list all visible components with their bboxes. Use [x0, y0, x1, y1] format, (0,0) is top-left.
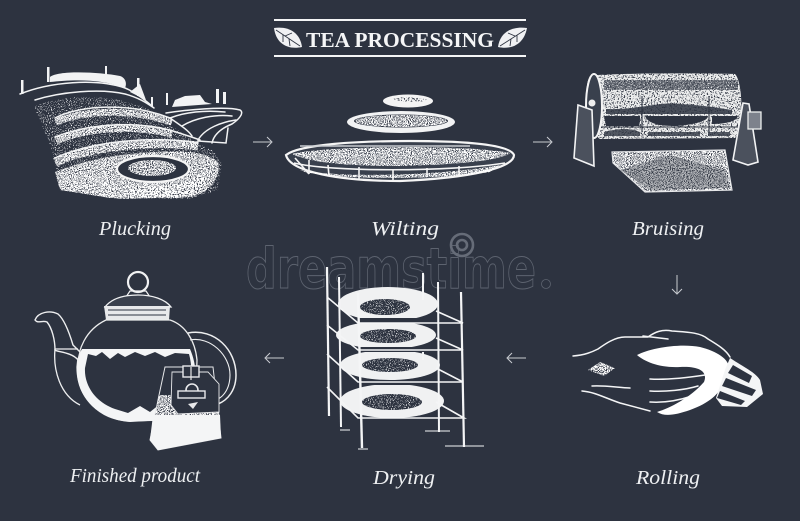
tea liquid: [77, 349, 196, 422]
step: wilting illustration: [286, 94, 514, 181]
title: TEA PROCESSING: [306, 28, 494, 52]
gear: [748, 112, 761, 129]
icon: left leaf: [274, 28, 302, 48]
hill stipple: [34, 97, 222, 199]
trays: [336, 287, 444, 418]
arrow: rolling to drying: [507, 353, 526, 363]
large tray: [286, 141, 514, 181]
label: Plucking: Plucking: [98, 218, 171, 240]
step: plucking illustration: [20, 66, 242, 199]
stands: [574, 105, 594, 166]
shelves: [327, 297, 464, 418]
plateau on top of hill: [116, 156, 190, 182]
spout: [35, 312, 80, 360]
step: rolling illustration: [573, 330, 763, 415]
tray: [612, 150, 732, 192]
teapot: [35, 272, 236, 422]
label: Rolling: Rolling: [635, 467, 700, 489]
fingers: [716, 358, 763, 407]
arrow: plucking to wilting: [253, 137, 272, 147]
arrow: wilting to bruising: [533, 137, 552, 147]
middle tray: [347, 111, 455, 133]
handle: [188, 332, 236, 404]
step: bruising illustration: [574, 73, 761, 192]
small tray: [383, 94, 433, 108]
terrace lines: [20, 82, 242, 158]
label: Finished product: Finished product: [69, 465, 200, 487]
label: Bruising: Bruising: [632, 218, 704, 240]
arrow: drying to finished product: [265, 353, 284, 363]
drum: [586, 73, 741, 139]
step: drying illustration: [327, 267, 484, 449]
label: Wilting: Wilting: [371, 218, 439, 240]
label: Drying: Drying: [372, 467, 435, 489]
tea bag: [150, 366, 221, 450]
title block: [274, 19, 527, 57]
step: finished product illustration: [35, 272, 236, 450]
tree line: [21, 66, 226, 107]
icon: right leaf: [498, 28, 527, 48]
rolled tea: [637, 346, 729, 415]
posts: [327, 267, 484, 449]
hand outline: [573, 330, 730, 411]
palm shading: [588, 362, 615, 376]
watermark: dreamstime: [246, 237, 536, 302]
arrow: bruising to rolling: [672, 275, 682, 294]
